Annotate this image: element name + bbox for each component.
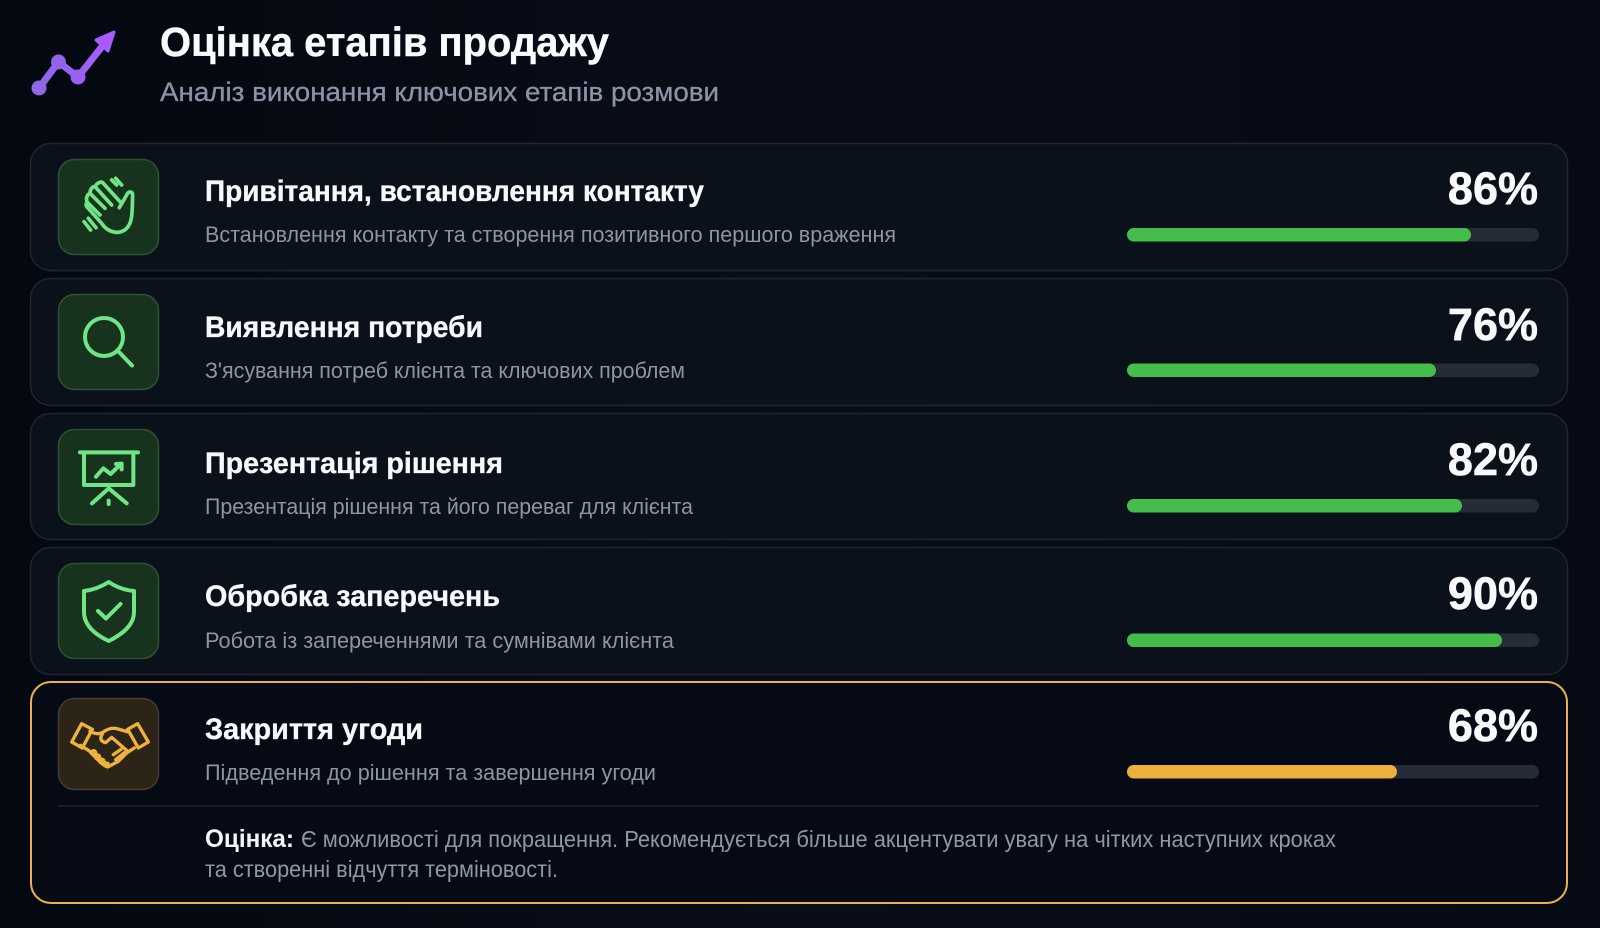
icon: purple trend arrow [32, 32, 114, 96]
score: 76% [1448, 299, 1538, 350]
icon: magnifier [58, 294, 158, 390]
stage name: Виявлення потреби [205, 311, 483, 344]
score: 68% [1448, 700, 1538, 751]
panel: objection handling stage [30, 548, 1568, 674]
icon: shield with check [58, 564, 158, 658]
panel: solution presentation stage [30, 414, 1568, 540]
stage description: Підведення до рішення та завершення угоди [205, 760, 656, 785]
progress bar [1127, 364, 1539, 377]
assessment text: Оцінка: [205, 825, 294, 853]
stage description: Встановлення контакту та створення позитивного першого враження [205, 222, 896, 247]
progress bar [1127, 765, 1539, 778]
score: 90% [1448, 568, 1538, 619]
score: 86% [1448, 163, 1538, 214]
stage description: З'ясування потреб клієнта та ключових проблем [205, 358, 685, 383]
icon: presentation board [58, 430, 158, 524]
stage description: Презентація рішення та його переваг для клієнта [205, 494, 694, 519]
progress bar [1127, 634, 1539, 647]
panel: deal closing stage with assessment [31, 682, 1567, 903]
assessment text: Є можливості для покращення. Рекомендується більше акцентувати увагу на чітких наступних кроках [301, 826, 1336, 852]
subtitle: Аналіз виконання ключових етапів розмови [160, 77, 719, 107]
panel: greeting stage [30, 144, 1568, 270]
title: Оцінка етапів продажу [160, 19, 609, 65]
stage name: Обробка заперечень [205, 580, 500, 613]
stage name: Презентація рішення [205, 447, 503, 480]
stage name: Привітання, встановлення контакту [205, 175, 704, 208]
icon: handshake [58, 698, 158, 790]
progress bar [1127, 499, 1539, 512]
stage name: Закриття угоди [205, 713, 423, 746]
stage description: Робота із запереченнями та сумнівами клієнта [205, 628, 675, 653]
assessment text [205, 825, 1336, 882]
assessment text: та створенні відчуття терміновості. [205, 856, 558, 882]
progress bar [1127, 228, 1539, 242]
score: 82% [1448, 434, 1538, 485]
icon: waving hand [58, 160, 158, 254]
panel: needs discovery stage [30, 278, 1568, 406]
